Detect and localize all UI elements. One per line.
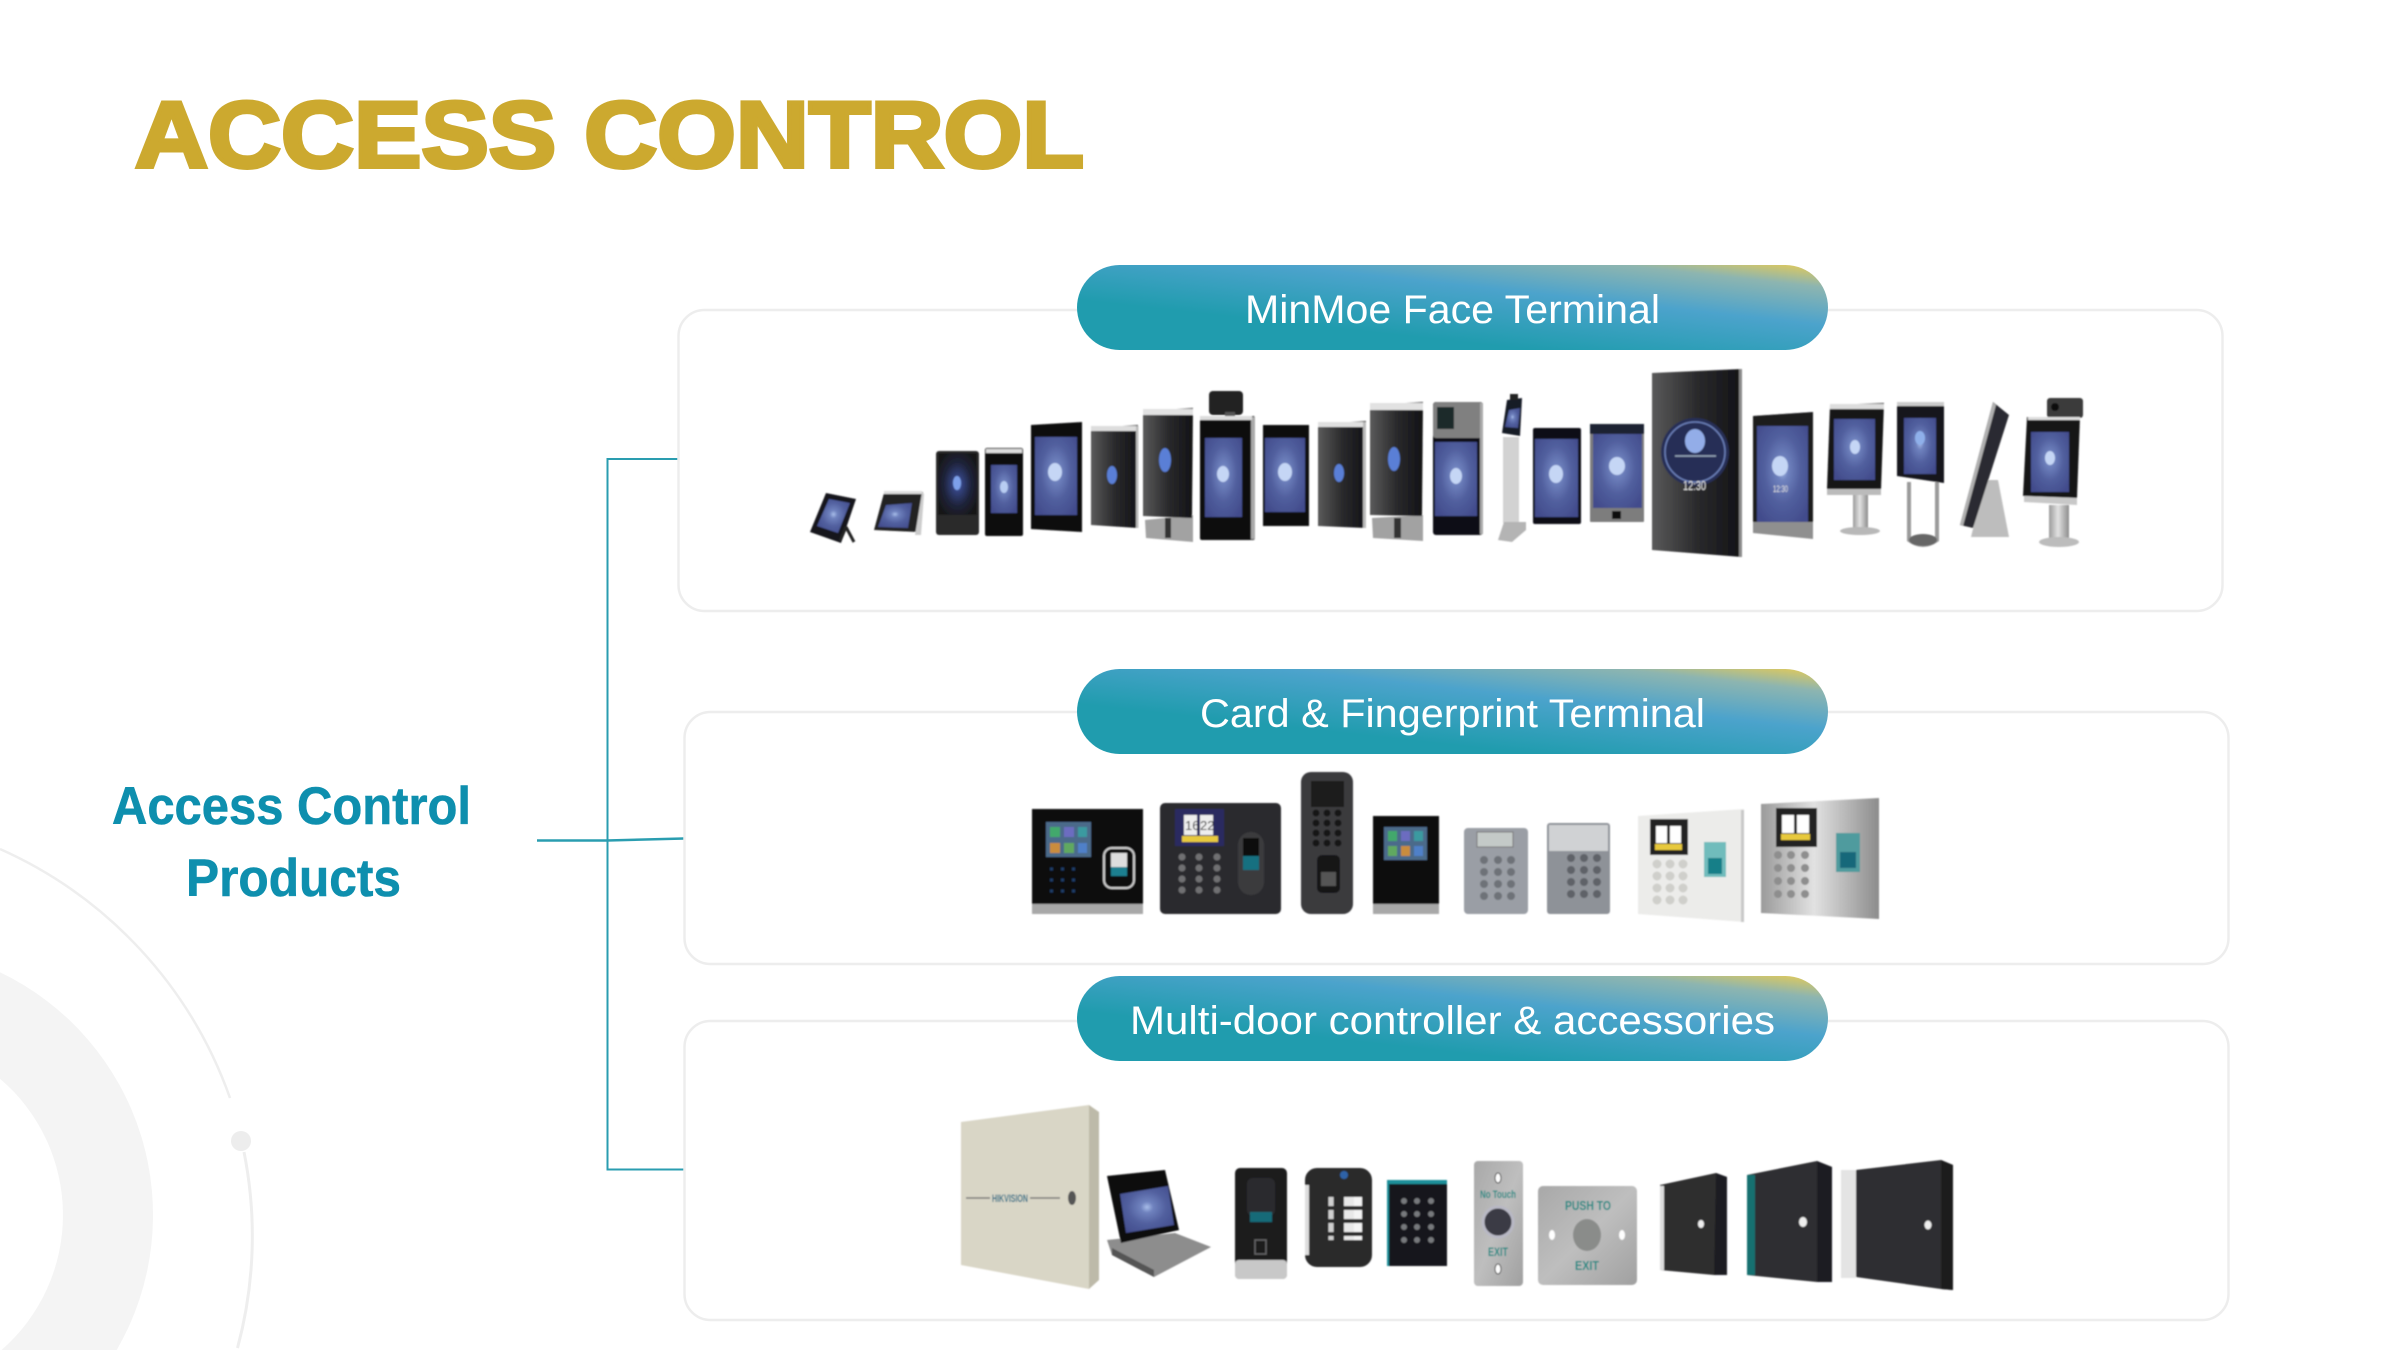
product row: controllers and accessories	[961, 1105, 1953, 1290]
device: gate-stand terminal 19	[1897, 402, 1944, 546]
device: keypad reader with white keys	[1305, 1168, 1372, 1267]
device: tall keypad reader C	[1301, 772, 1353, 914]
device: terminal 10	[1318, 421, 1366, 528]
device: small tilted tablet	[810, 493, 856, 543]
product row: card and fingerprint terminals	[1032, 772, 1879, 922]
device: kiosk terminal on pole	[1498, 394, 1526, 542]
device: Push to Exit button: EXIT	[1575, 1258, 1599, 1273]
device: dark keypad terminal B	[1160, 803, 1281, 914]
device: large wall terminal	[1652, 369, 1742, 557]
device: large dark enclosure with door	[1841, 1160, 1953, 1290]
device: MinMoe slim terminal	[936, 451, 979, 535]
device: Push to Exit button: PUSH TO	[1565, 1198, 1611, 1213]
device: No Touch exit button	[1474, 1161, 1523, 1286]
device: terminal 15	[1590, 424, 1644, 522]
device: fingerprint terminal 11	[1370, 402, 1423, 541]
left label: Access Control Products: Access Control	[112, 777, 471, 836]
device: slim fingerprint reader	[1235, 1168, 1287, 1279]
product row: face terminals	[810, 369, 2083, 557]
device: beige controller cabinet: HIKVISION	[992, 1193, 1028, 1205]
device: terminal 6	[1091, 425, 1138, 528]
device: silver fingerprint terminal H	[1761, 798, 1879, 919]
background decorative circles	[0, 849, 252, 1350]
title: ACCESS CONTROL	[135, 82, 1084, 187]
device: black touch terminal D	[1373, 816, 1439, 914]
device: dark keypad terminal B: 22	[1200, 818, 1214, 833]
device: camera terminal 12	[1433, 402, 1483, 535]
device: terminal 5	[1031, 422, 1082, 532]
left label: Access Control Products: Products	[186, 849, 401, 908]
device: large wall terminal: 12:30	[1683, 478, 1706, 493]
device: teal-top keypad reader	[1387, 1180, 1447, 1266]
device: No Touch exit button: EXIT	[1488, 1245, 1509, 1259]
device: terminal 17: 12:30	[1773, 484, 1788, 494]
device: terminal 17	[1753, 412, 1813, 539]
device: desktop face terminal with base	[1107, 1170, 1211, 1277]
pill heading: MinMoe Face Terminal: MinMoe Face Terminal	[1245, 288, 1660, 332]
device: Push to Exit button	[1538, 1186, 1637, 1285]
device: small desk tablet	[874, 491, 924, 535]
device: grey card reader F	[1547, 823, 1610, 914]
device: dark keypad terminal B: 16	[1185, 818, 1199, 833]
left label: Access Control Products	[112, 777, 471, 908]
pill heading: MinMoe Face Terminal	[1077, 265, 1828, 350]
device: fingerprint terminal 7	[1143, 408, 1193, 542]
pill heading: Multi-door controller and accessories: Multi-door controller & accessories	[1130, 999, 1775, 1043]
pill heading: Card and Fingerprint Terminal	[1077, 669, 1828, 754]
device: terminal 9	[1263, 425, 1309, 526]
panel: Card and Fingerprint Terminal	[684, 712, 2228, 964]
pill heading: Multi-door controller and accessories	[1077, 976, 1828, 1061]
device: thermal camera terminal 8	[1200, 391, 1255, 540]
pill heading: Card and Fingerprint Terminal: Card & Fingerprint Terminal	[1200, 692, 1705, 736]
device: MinMoe black terminal	[985, 448, 1023, 536]
connector bracket	[537, 459, 684, 1170]
panel: MinMoe Face Terminal	[678, 310, 2222, 611]
device: silver card reader E	[1464, 828, 1528, 914]
panel: Multi-door controller and accessories	[684, 1021, 2228, 1320]
device: side view terminal 20	[1960, 402, 2009, 537]
device: medium dark enclosure	[1747, 1161, 1832, 1282]
device: black touch terminal A	[1032, 809, 1143, 914]
device: pedestal camera terminal 21	[2023, 398, 2083, 547]
device: No Touch exit button: No Touch	[1480, 1189, 1516, 1201]
device: beige controller cabinet	[961, 1105, 1099, 1289]
device: terminal 14	[1533, 428, 1581, 524]
device: white fingerprint terminal G	[1638, 809, 1744, 922]
device: small dark enclosure	[1660, 1173, 1727, 1275]
device: pedestal terminal 18	[1827, 403, 1884, 535]
